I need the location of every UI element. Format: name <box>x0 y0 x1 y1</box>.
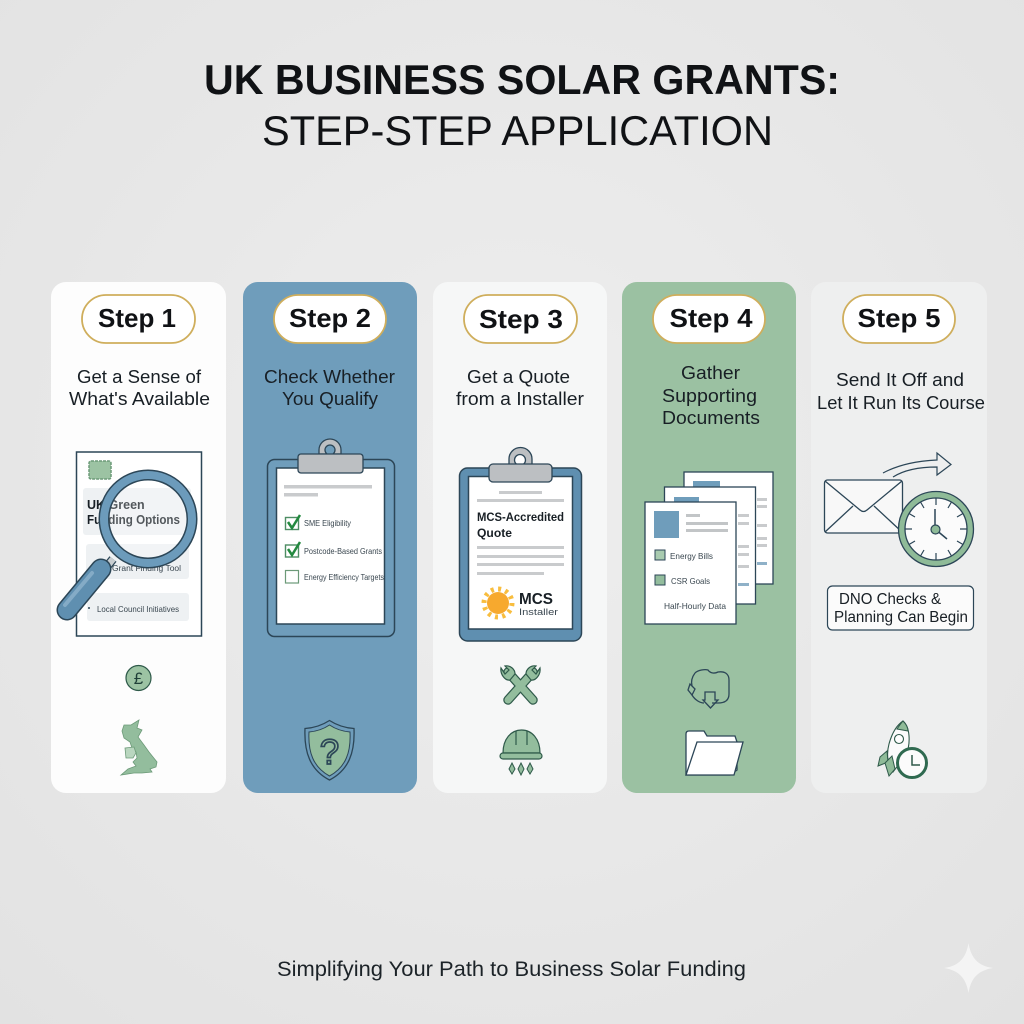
icon: shield with question mark: ? <box>320 733 339 772</box>
icon: arrow <box>883 453 951 477</box>
title: UK BUSINESS SOLAR GRANTS: <box>204 56 840 103</box>
icon: rocket and clock <box>878 721 926 778</box>
icon: pound coin <box>126 666 151 690</box>
quote heading: MCS-Accredited <box>477 510 564 524</box>
step 2 heading: Check Whether <box>264 367 395 387</box>
step 4 badge <box>653 295 765 343</box>
step 1 badge: Step 1 <box>98 303 176 333</box>
funding options document: UK Green <box>87 498 145 512</box>
step 1 badge <box>82 295 195 343</box>
step 3 heading: Get a Quote <box>467 367 570 387</box>
step 4 heading: Supporting <box>662 386 757 406</box>
step 1 heading <box>69 367 210 409</box>
icon: MCS sun logo: Installer <box>519 607 558 617</box>
funding options document: Local Council Initiatives <box>97 604 179 614</box>
icon: sparkle watermark <box>944 943 993 993</box>
step 5 badge <box>843 295 955 343</box>
step 4 badge: Step 4 <box>670 303 753 333</box>
checklist item: postcode-based grants <box>286 542 382 557</box>
icon: magnifying glass <box>65 475 192 610</box>
step 5 heading <box>817 370 985 413</box>
panel: step 4 <box>622 282 796 793</box>
funding options document: Grant Finding Tool <box>112 564 181 573</box>
funding options document: Funding Options <box>87 513 180 527</box>
checklist item: postcode-based grants: Postcode-Based Grants <box>304 547 382 556</box>
step 5 badge: Step 5 <box>858 303 940 333</box>
step 2 heading: You Qualify <box>282 389 378 409</box>
icon: pound coin: £ <box>134 669 144 688</box>
icon: clock <box>898 492 974 566</box>
callout: DNO checks: DNO Checks & <box>839 591 942 608</box>
callout: DNO checks: Planning Can Begin <box>834 609 968 626</box>
title: STEP-STEP APPLICATION <box>262 107 773 154</box>
step 4 heading <box>662 363 760 428</box>
checklist item: energy efficiency targets <box>286 570 384 583</box>
quote heading <box>477 510 564 540</box>
step 4 heading: Gather <box>681 363 740 383</box>
icon: MCS sun logo <box>484 589 558 617</box>
icon: recycle and download <box>688 670 729 708</box>
document item: energy bills: Energy Bills <box>670 551 713 561</box>
step 3 heading <box>456 367 584 409</box>
step 3 badge <box>464 295 577 343</box>
MCS quote clipboard <box>460 448 582 641</box>
icon: MCS sun logo: MCS <box>519 591 553 608</box>
panel: step 5 <box>811 282 987 793</box>
document item: half-hourly data: Half-Hourly Data <box>664 601 726 611</box>
footer tagline: Simplifying Your Path to Business Solar Funding <box>277 958 746 981</box>
step 1 heading: Get a Sense of <box>77 367 202 387</box>
title <box>204 56 840 154</box>
document item: CSR goals: CSR Goals <box>671 576 710 586</box>
checklist item: SME eligibility: SME Eligibility <box>304 519 351 528</box>
checklist item: energy efficiency targets: Energy Efficiency Targets <box>304 573 384 582</box>
icon: open folder <box>686 731 743 775</box>
icon: UK map <box>121 720 157 775</box>
step 1 heading: What's Available <box>69 389 210 409</box>
panel: step 1 <box>51 282 226 793</box>
step 2 badge <box>274 295 386 343</box>
document item: energy bills <box>655 550 713 561</box>
step 3 badge: Step 3 <box>479 304 563 334</box>
eligibility clipboard <box>268 439 394 636</box>
stacked supporting documents <box>645 472 773 624</box>
icon: shield with question mark <box>305 720 354 780</box>
step 3 heading: from a Installer <box>456 389 584 409</box>
callout: DNO checks <box>828 586 974 630</box>
panel: step 3 <box>433 282 607 793</box>
icon: crossed wrenches <box>501 666 540 700</box>
step 5 heading: Send It Off and <box>836 370 964 390</box>
icon: hard hat <box>500 730 542 775</box>
step 2 badge: Step 2 <box>289 303 371 333</box>
step 2 heading <box>264 367 395 409</box>
quote heading: Quote <box>477 526 512 540</box>
icon: envelope <box>824 480 902 533</box>
panel: step 2 <box>243 282 417 793</box>
step 4 heading: Documents <box>662 408 760 428</box>
step 5 heading: Let It Run Its Course <box>817 393 985 413</box>
funding options document <box>76 452 202 636</box>
checklist item: SME eligibility <box>286 515 351 530</box>
document item: CSR goals <box>655 575 710 586</box>
